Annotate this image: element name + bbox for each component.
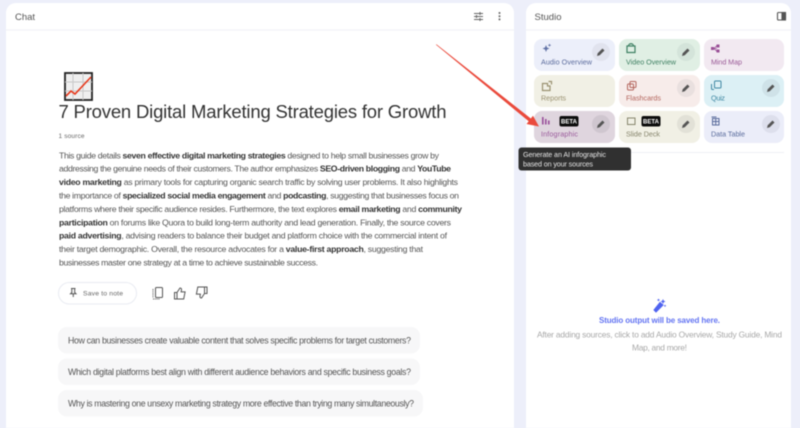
card: infographic bbox=[534, 111, 615, 143]
text block: summary: paid advertising, advising readers to balance their budget and platform choice with the commercial intent of bbox=[59, 231, 448, 241]
icon: quiz bbox=[712, 81, 721, 90]
card: video overview bbox=[619, 39, 700, 71]
card: reports bbox=[534, 75, 615, 107]
icon: video bbox=[627, 44, 635, 52]
suggestion: unsexy strategy: Why is mastering one unsexy marketing strategy more effective than trying many simultaneously? bbox=[68, 398, 414, 408]
empty state heading: Studio output will be saved here. bbox=[599, 316, 720, 325]
text block: summary: businesses master one strategy at a time to achieve sustainable success. bbox=[59, 258, 318, 268]
icon: thumbs up bbox=[174, 288, 185, 299]
suggestion: valuable content bbox=[58, 327, 420, 354]
tooltip bbox=[518, 148, 631, 170]
card: data table bbox=[704, 111, 784, 143]
suggestion: digital platforms: Which digital platforms best align with different audience behaviors and specific business goals? bbox=[68, 367, 411, 377]
badge: beta: BETA bbox=[643, 120, 660, 126]
text block: summary: the importance of specialized social media engagement and podcasting, suggesting that businesses focus on bbox=[59, 190, 459, 200]
card: slide deck: Slide Deck bbox=[626, 130, 660, 138]
text block: summary: This guide details seven effective digital marketing strategies designed to help small businesses grow by bbox=[59, 150, 440, 160]
card: audio overview: Audio Overview bbox=[541, 58, 593, 66]
text block: summary: addressing the genuine needs of their customers. The author emphasizes SEO-driven blogging and YouTube bbox=[59, 164, 451, 174]
card: quiz bbox=[704, 75, 784, 107]
card: video overview: Video Overview bbox=[626, 58, 677, 66]
source count: 1 source bbox=[58, 133, 85, 140]
text block: summary: their target demographic. Overall, the resource advocates for a value-first approach, suggesting that bbox=[59, 244, 424, 254]
arrow: points to infographic card bbox=[436, 44, 539, 126]
panel: chat bbox=[6, 3, 514, 428]
suggestion: digital platforms bbox=[58, 358, 420, 385]
empty state description: After adding sources, click to add Audio Overview, Study Guide, Mind bbox=[537, 330, 782, 340]
card: reports: Reports bbox=[541, 94, 566, 102]
icon: mind map bbox=[711, 44, 720, 52]
icon: more menu bbox=[498, 12, 500, 20]
icon: reports bbox=[542, 82, 552, 90]
card: flashcards: Flashcards bbox=[626, 94, 661, 102]
card: flashcards bbox=[619, 75, 700, 107]
suggestion: valuable content: How can businesses create valuable content that solves specific problems for target customers? bbox=[68, 335, 411, 345]
tooltip: Generate an AI infographic bbox=[523, 150, 606, 159]
text block: summary: platforms where their specific audience resides. Furthermore, the text explores email marketing and community bbox=[59, 204, 462, 214]
panel: studio bbox=[526, 3, 791, 428]
icon: slides bbox=[628, 118, 635, 124]
heading: studio: Studio bbox=[534, 12, 562, 23]
icon: rising chart emoji bbox=[65, 73, 92, 100]
empty state description: Map, and more! bbox=[632, 342, 687, 352]
card: quiz: Quiz bbox=[711, 94, 725, 102]
icon: collapse panel bbox=[778, 12, 786, 20]
button: save to note bbox=[58, 282, 136, 304]
card: mind map: Mind Map bbox=[711, 58, 742, 66]
icon: magic wand bbox=[654, 298, 666, 312]
card: mind map bbox=[704, 39, 784, 71]
card: data table: Data Table bbox=[711, 130, 745, 138]
badge: beta: BETA bbox=[561, 120, 578, 126]
text block: summary bbox=[59, 150, 462, 268]
icon: tune settings bbox=[474, 12, 483, 21]
icon: sparkle bbox=[542, 44, 551, 52]
icon: flashcards bbox=[628, 82, 636, 90]
icon: infographic bars bbox=[542, 117, 550, 124]
icon: table bbox=[712, 117, 719, 125]
card: audio overview bbox=[534, 39, 615, 71]
card: infographic: Infographic bbox=[541, 130, 578, 138]
text block: summary: video marketing as primary tools for capturing organic search traffic by solving user problems. It also highlights bbox=[59, 177, 459, 187]
empty state description bbox=[537, 330, 782, 352]
suggestion: unsexy strategy bbox=[58, 390, 423, 416]
text block: summary: participation on forums like Quora to build long-term authority and lead generation. Finally, the source covers bbox=[59, 217, 452, 227]
icon: pin bbox=[70, 288, 76, 297]
button label: Save to note bbox=[83, 291, 123, 298]
tooltip: based on your sources bbox=[523, 159, 593, 168]
icon: copy bbox=[153, 288, 162, 299]
heading: chat: Chat bbox=[15, 12, 35, 23]
card: slide deck bbox=[619, 111, 700, 143]
title: 7 Proven Digital Marketing Strategies for Growth bbox=[58, 101, 446, 122]
icon: thumbs down bbox=[196, 287, 207, 298]
